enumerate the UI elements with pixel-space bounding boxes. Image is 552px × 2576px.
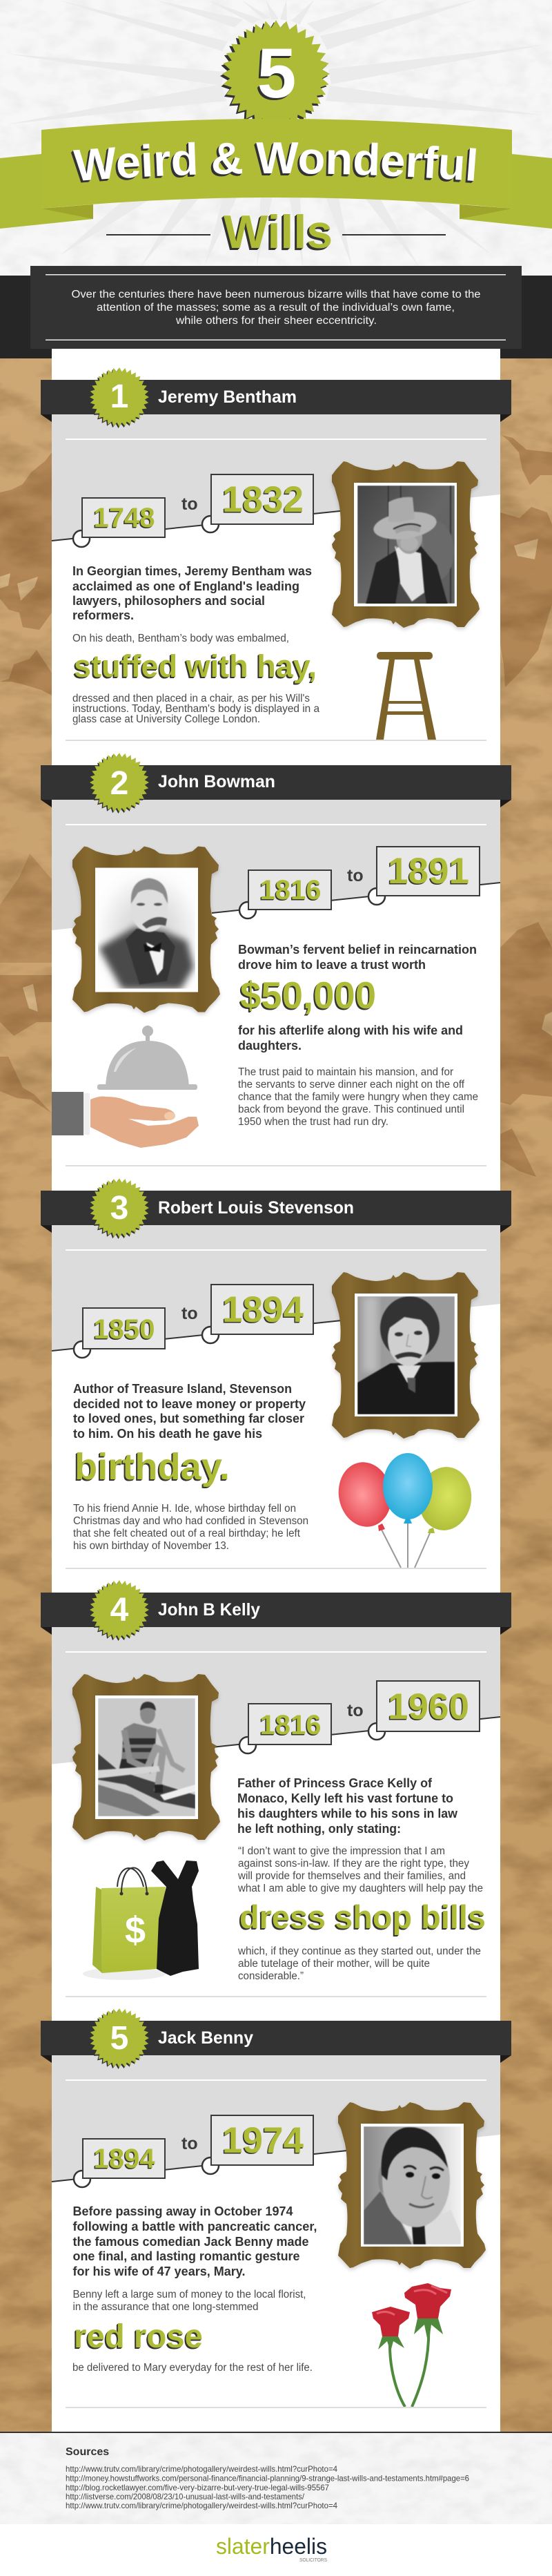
timeline [52,2115,347,2187]
footer sources: http://money.howstuffworks.com/personal-finance/financial-planning/9-strange-last-wills-and-testaments.htm#page=6 [66,2474,469,2483]
body text [237,1945,481,1982]
intro text: while others for their sheer eccentricity. [175,315,377,327]
body text: back from beyond the grave. This continued until [238,1104,464,1115]
intro text: Over the centuries there have been numerous bizarre wills that have come to the [72,289,480,300]
highlight phrase: red rose [74,2318,203,2355]
body text: considerable.” [238,1970,304,1982]
name banner [41,1580,511,1641]
body text: Benny left a large sum of money to the local florist, [73,2289,306,2300]
body text: in the assurance that one long-stemmed [73,2301,258,2313]
timeline: 1850 [94,1314,155,1345]
portrait frame [72,847,220,1012]
logo: slaterheelis solicitors: SOLICITORS [299,2558,327,2563]
highlight phrase: birthday. [75,1446,230,1488]
body text: “I don’t want to give the impression that I am [238,1845,445,1857]
timeline: to [347,866,364,885]
icon: shopping bag and dress: $ [125,1910,146,1951]
name banner [41,1178,511,1239]
intro statement [73,1382,306,1441]
intro statement: following a battle with pancreatic cancer, [73,2220,317,2233]
intro statement: acclaimed as one of England's leading [72,579,299,593]
body text: the servants to serve dinner each night on the off [238,1079,465,1090]
intro statement: decided not to leave money or property [73,1397,306,1411]
body text [238,1066,478,1128]
body text: that she felt cheated out of a real birthday; he left [73,1528,301,1539]
body text [237,1845,483,1894]
timeline: to [181,1304,198,1323]
intro statement: Bowman’s fervent belief in reincarnation [238,943,477,957]
name banner: 1 [110,378,128,415]
timeline: to [347,1701,364,1720]
intro statement: Father of Princess Grace Kelly of [237,1776,433,1790]
timeline: 1891 [388,851,469,892]
timeline [52,474,342,547]
intro statement [73,2204,317,2278]
intro statement: the famous comedian Jack Benny made [73,2235,309,2249]
icon: stool [376,652,436,740]
section 2: John Bowman [41,753,511,1166]
timeline: to [181,2134,198,2153]
body text: will provide for themselves and their families, and [237,1870,466,1882]
highlight amount: $50,000 [240,974,376,1017]
timeline: 1816 [260,875,321,905]
body text [73,2289,306,2313]
portrait frame [332,461,480,628]
logo: slaterheelis solicitors: slaterheelis [216,2534,327,2559]
body text: chance that the family were hungry when they came [238,1091,478,1103]
footer sources: http://listverse.com/2008/08/23/10-unusual-last-wills-and-testaments/ [66,2492,305,2501]
statement continued [238,1023,463,1052]
header paper background with sunburst [0,0,552,276]
diagonal grey panel [52,1225,500,1351]
section 1: Jeremy Bentham [41,367,511,741]
name banner: 3 [110,1190,128,1227]
diagonal grey panel [52,414,500,541]
timeline: 1748 [94,503,155,533]
body text: The trust paid to maintain his mansion, and for [238,1066,453,1078]
body text: On his death, Bentham’s body was embalmed, [72,633,289,644]
portrait frame [332,1272,480,1439]
intro statement: lawyers, philosophers and social [72,594,265,608]
intro statement [72,564,312,622]
intro statement: In Georgian times, Jeremy Bentham was [72,564,312,578]
icon: cloche and hand [52,1026,199,1148]
footer sources: http://www.trutv.com/library/crime/photogallery/weirdest-wills.html?curPhoto=4 [66,2501,337,2510]
title: starburst with 5 [220,20,330,130]
body text: Christmas day and who had confided in Stevenson [73,1515,308,1527]
portrait frame [72,1674,220,1840]
body text: dressed and then placed in a chair, as per his Will's [72,693,310,704]
timeline: 1894 [94,2144,155,2174]
diagonal grey panel [52,800,500,930]
body text: glass case at University College London. [72,713,260,725]
section 4: John B Kelly [41,1580,511,1997]
statement continued: for his afterlife along with his wife and [238,1023,463,1037]
title: starburst with 5: 5 [257,34,296,113]
timeline: 1832 [222,479,304,520]
intro text: attention of the masses; some as a result of the individual’s own fame, [97,302,455,314]
intro text [72,289,480,327]
name banner: John B Kelly [158,1600,260,1619]
title ribbon [0,119,552,229]
timeline [215,1681,500,1753]
name banner: Jeremy Bentham [158,387,297,407]
intro statement: Before passing away in October 1974 [73,2204,293,2218]
intro statement: his daughters while to his sons in law [237,1807,458,1820]
timeline: 1974 [222,2120,304,2161]
intro band [0,266,552,358]
name banner [41,367,511,428]
body text: which, if they continue as they started out, under the [237,1945,481,1957]
statement continued: daughters. [238,1039,302,1052]
timeline [212,847,500,919]
body text: instructions. Today, Bentham's body is displayed in a [72,703,319,715]
name banner: 2 [110,765,128,802]
intro statement [237,1776,458,1836]
highlight phrase: dress shop bills [239,1899,486,1935]
section 3: Robert Louis Stevenson [41,1178,511,1569]
intro statement: to loved ones, but something far closer [73,1412,304,1425]
footer sources [0,2432,552,2524]
timeline: 1894 [222,1289,304,1330]
timeline: 1816 [260,1710,321,1740]
white content panel [52,349,500,2432]
section 5: Jack Benny [41,2008,511,2408]
name banner [41,753,511,814]
body text: what I am able to give my daughters will help pay the [237,1883,483,1894]
icon: roses [372,2283,451,2407]
body text [72,693,319,725]
body text: To his friend Annie H. Ide, whose birthday fell on [73,1503,296,1515]
title: Wills: Wills [224,206,333,258]
intro statement: he left nothing, only stating: [237,1822,401,1836]
intro statement: Author of Treasure Island, Stevenson [73,1382,292,1396]
body text: 1950 when the trust had run dry. [238,1116,388,1128]
name banner: 5 [110,2020,128,2057]
portrait frame [338,2102,486,2269]
name banner: 4 [110,1592,129,1628]
body text: able tutelage of their mother, will be quite [238,1958,430,1970]
body text: his own birthday of November 13. [73,1540,229,1552]
body text [73,1503,308,1552]
intro statement: reformers. [72,608,134,622]
body text: be delivered to Mary everyday for the rest of her life. [72,2362,313,2374]
diagonal grey panel [52,1627,500,1764]
intro statement [238,943,477,972]
highlight phrase: stuffed with hay, [74,648,317,684]
timeline [52,1285,342,1358]
timeline: to [181,494,198,514]
name banner: Robert Louis Stevenson [158,1198,354,1218]
name banner [41,2008,511,2069]
footer sources: http://www.trutv.com/library/crime/photogallery/weirdest-wills.html?curPhoto=4 [66,2464,337,2474]
intro statement: drove him to leave a trust worth [238,958,426,972]
footer sources: Sources [66,2446,109,2458]
icon: shopping bag and dress [83,1861,199,1980]
name banner: Jack Benny [158,2028,253,2048]
intro statement: Monaco, Kelly left his vast fortune to [237,1791,453,1805]
diagonal grey panel [52,2055,500,2182]
intro statement: one final, and lasting romantic gesture [73,2249,299,2263]
icon: balloons [333,1453,475,1568]
timeline: 1960 [388,1686,469,1727]
title: Weird & Wonderful: Weird & Wonderful [70,142,476,183]
body text: against sons-in-law. If they are the right type, they [238,1858,469,1869]
title: Weird & Wonderful [70,142,476,183]
intro statement: to him. On his death he gave his [73,1427,262,1441]
name banner: John Bowman [158,772,275,791]
footer sources: http://blog.rocketlawyer.com/five-very-bizarre-but-very-true-legal-wills-95567 [66,2483,329,2492]
intro statement: for his wife of 47 years, Mary. [73,2265,246,2278]
